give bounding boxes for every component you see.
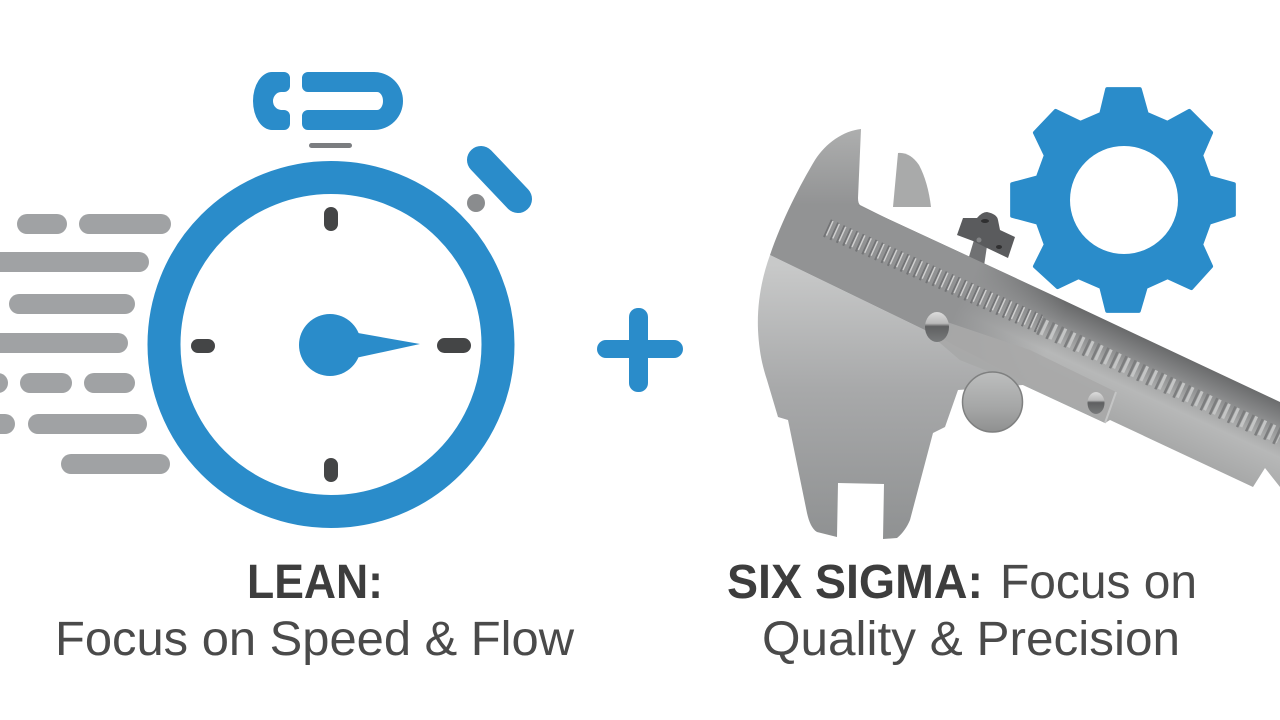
upper fixed jaw	[770, 129, 960, 330]
crown underline	[309, 143, 352, 148]
left band shading	[771, 205, 1105, 423]
stopwatch icon	[164, 72, 518, 512]
lower rivet	[1088, 392, 1104, 414]
main caliper body	[758, 255, 1040, 539]
small upper jaw	[893, 153, 931, 207]
slider plate edge	[1105, 392, 1116, 423]
plus sign	[597, 308, 683, 392]
thumb wheel	[962, 372, 1022, 432]
six sigma description: Quality & Precision	[762, 613, 1180, 666]
vernier caliper icon	[758, 129, 1280, 539]
side button dot	[467, 194, 485, 212]
ruler scale ticks	[827, 228, 1280, 437]
sliding plate	[925, 322, 1116, 423]
clock hand	[299, 314, 420, 376]
depth lock screw	[957, 212, 1015, 266]
stopwatch crown	[253, 72, 403, 130]
six sigma heading: SIX SIGMA:	[727, 556, 983, 609]
side button	[481, 160, 518, 199]
lean description: Focus on Speed & Flow	[55, 613, 574, 666]
gear icon	[1012, 89, 1234, 311]
lean heading: LEAN:	[247, 556, 383, 609]
ruler beam	[858, 205, 1280, 487]
hour ticks	[191, 207, 471, 482]
upper rivet	[925, 312, 949, 342]
motion speed lines	[0, 214, 171, 474]
six sigma focus text: Focus on	[1000, 556, 1197, 609]
watch ring	[164, 178, 498, 512]
